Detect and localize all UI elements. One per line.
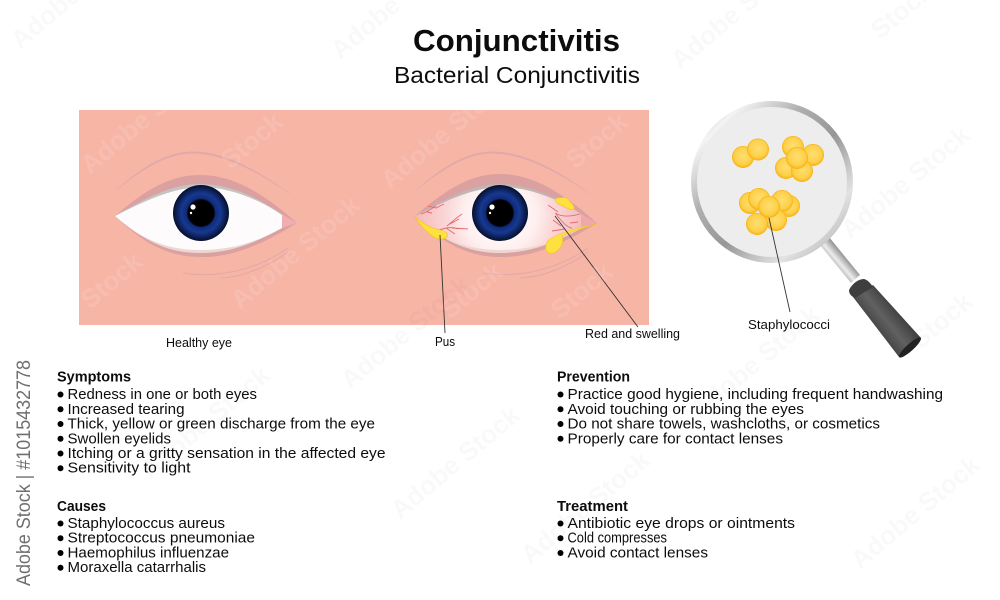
panel: treatment: Cold compresses: [568, 530, 667, 547]
icon: magnifying glass: [694, 104, 923, 360]
panel: causes: Staphylococcus aureus: [68, 515, 225, 532]
panel: causes: Streptococcus pneumoniae: [68, 530, 255, 547]
panel: symptoms: Symptoms: [57, 370, 131, 386]
text: Stock: [435, 256, 509, 325]
pus right: [546, 224, 597, 253]
panel: treatment: Antibiotic eye drops or ointments: [568, 515, 795, 532]
panel: treatment: Avoid contact lenses: [568, 544, 708, 562]
text: Adobe Stock: [375, 69, 516, 195]
icon: healthy eye: [113, 151, 297, 278]
text: Stock: [560, 106, 634, 175]
panel: symptoms: Itching or a gritty sensation in the affected eye: [68, 445, 386, 462]
panel: causes: Moraxella catarrhalis: [68, 559, 206, 576]
handle rod: [820, 237, 860, 283]
panel: symptoms: [57, 370, 386, 477]
leader line: staphylococci: [769, 218, 790, 312]
panel: prevention: Practice good hygiene, including frequent handwashing: [568, 386, 943, 403]
panel: symptoms: Thick, yellow or green discharge from the eye: [68, 416, 375, 432]
panel: causes: [57, 499, 255, 576]
panel: symptoms: Redness in one or both eyes: [68, 386, 257, 403]
title: Conjunctivitis: [413, 23, 620, 58]
panel: prevention: Avoid touching or rubbing the eyes: [568, 401, 804, 418]
icon: infected eye: [413, 151, 597, 278]
pus upper: [555, 198, 574, 210]
bacteria clusters: [732, 136, 824, 235]
text: Stock: [215, 106, 289, 175]
subtitle: Bacterial Conjunctivitis: [394, 62, 640, 88]
panel: symptoms: Sensitivity to light: [68, 460, 191, 477]
panel: causes: Haemophilus influenzae: [68, 544, 229, 562]
lens: [694, 104, 850, 260]
label: staphylococci: Staphylococci: [748, 318, 830, 332]
leader line: pus: [440, 235, 445, 333]
panel: eye comparison background: [79, 110, 649, 325]
pus left: [415, 217, 448, 239]
text: Adobe Stock: [75, 54, 216, 180]
text: Stock: [545, 256, 619, 325]
icon: infected iris: [472, 185, 528, 241]
label: red and swelling: Red and swelling: [585, 327, 680, 341]
panel: prevention: Do not share towels, washcloths, or cosmetics: [568, 416, 880, 432]
watermark: vertical stock id: Adobe Stock | #1015432778: [14, 360, 35, 586]
handle grip: [849, 279, 923, 360]
panel: prevention: [557, 370, 943, 447]
label: healthy eye: Healthy eye: [166, 336, 232, 350]
panel: prevention: Properly care for contact lenses: [568, 430, 783, 447]
text: Adobe Stock: [225, 189, 366, 315]
panel: prevention: Prevention: [557, 370, 630, 386]
icon: healthy iris: [173, 185, 229, 241]
panel: treatment: Treatment: [557, 499, 628, 515]
panel: treatment: [557, 499, 795, 562]
panel: causes: Causes: [57, 499, 106, 515]
leader line: red and swelling: [555, 216, 638, 327]
blood vessels: [421, 204, 580, 234]
panel: symptoms: Swollen eyelids: [68, 430, 171, 447]
label: pus: Pus: [435, 335, 455, 349]
panel: symptoms: Increased tearing: [68, 401, 184, 418]
text: Stock: [75, 246, 149, 315]
